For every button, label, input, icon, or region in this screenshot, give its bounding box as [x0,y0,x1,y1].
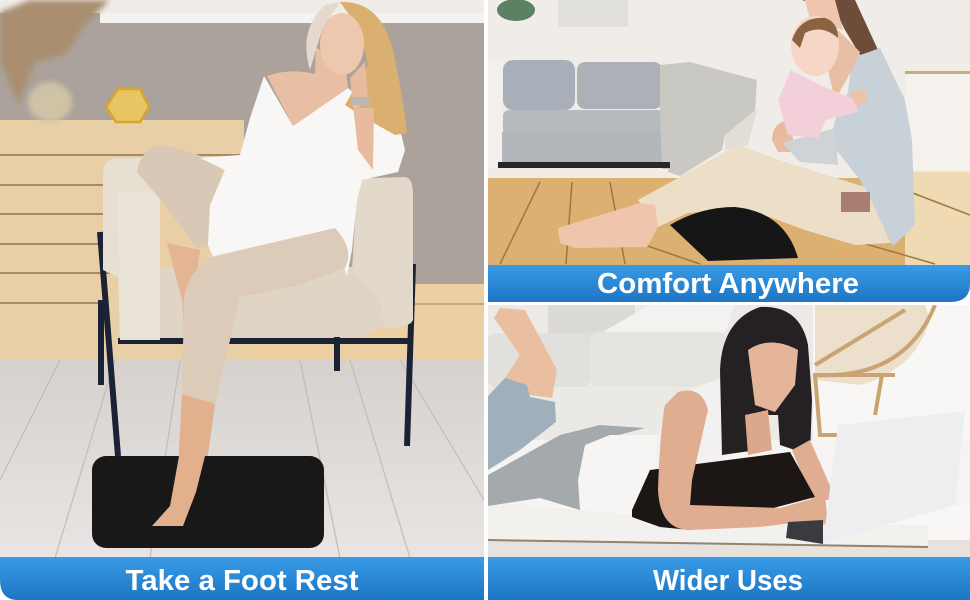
near arm [658,390,828,530]
black half-round foot rest [670,207,798,261]
baby trousers [782,128,838,165]
standing foot [178,394,215,456]
baby head [791,16,839,76]
hair [720,307,812,455]
grey sofa [502,60,757,176]
shirt [831,48,915,246]
rattan chair [813,305,935,435]
near leg [182,228,348,405]
arm and hand [350,62,374,170]
woman [488,307,832,512]
banner: Wider Uses [488,557,970,600]
tank top [655,378,722,470]
armchair [100,158,413,456]
face [320,13,364,75]
bent leg [137,145,222,248]
photo: mother and baby on floor [488,0,970,266]
beige legs [638,145,891,245]
face [748,342,798,412]
mother's neck [828,30,860,100]
hair [340,2,407,135]
baby top [778,70,858,138]
white sofa [488,305,813,440]
right cabinet [905,72,970,170]
banner: Take a Foot Rest [0,557,484,600]
banner: Wider Uses: Wider Uses [653,565,803,597]
white top [578,435,665,512]
photo: woman on rug with laptop [488,305,970,558]
woman [137,2,407,456]
black half-round rest [632,452,815,530]
lower jeans [488,378,556,470]
foot [558,203,658,248]
floor [0,360,484,558]
hips [488,425,645,510]
white shirt [200,76,405,276]
hand [772,120,795,152]
dried plant and glass vase [0,0,110,122]
wooden floor [488,169,970,266]
chest and neck [267,48,348,126]
house plant [497,0,535,21]
banner: Comfort Anywhere: Comfort Anywhere [597,268,859,300]
rug and floor [488,539,970,557]
black foot rest [92,456,324,548]
mother and baby [558,0,915,248]
photo: woman on armchair with foot on rest [0,0,484,558]
banner: Comfort Anywhere [488,265,970,302]
foot and calf [494,308,557,398]
neck [745,410,772,455]
wooden sideboard [0,120,484,360]
gold ornament [106,89,149,122]
banner: Take a Foot Rest: Take a Foot Rest [126,565,359,597]
far arm [792,440,832,500]
mother's hair [802,0,878,55]
laptop [786,411,965,544]
